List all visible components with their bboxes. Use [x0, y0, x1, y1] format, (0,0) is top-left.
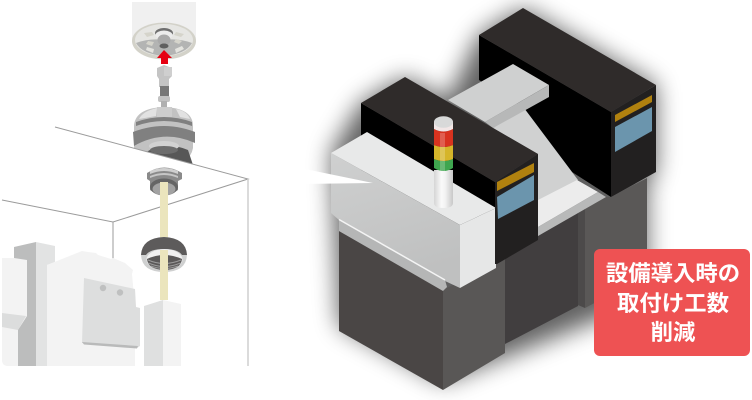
front unit end face [495, 154, 538, 264]
mounting flange disc [132, 22, 196, 60]
callout: reduced installation man-hours [594, 249, 750, 356]
callout: reduced installation man-hours: 取付け工数 [617, 290, 729, 316]
front amber strip [497, 163, 534, 191]
callout wedge [300, 168, 373, 184]
front black unit top and side [361, 77, 538, 264]
ceiling mount backdrop [132, 2, 196, 42]
cream cable [160, 180, 168, 300]
slab trim strip [339, 220, 447, 291]
signal tower [434, 116, 453, 208]
red arrow [157, 50, 172, 64]
main block [47, 251, 135, 366]
gray plank [448, 64, 549, 128]
base right face [443, 258, 505, 390]
left band [2, 313, 26, 330]
machine drop shadow [331, 8, 656, 382]
base recessed middle [505, 205, 585, 344]
rear amber strip [615, 95, 652, 122]
T column [14, 242, 55, 366]
callout: reduced installation man-hours: 削減 [651, 320, 695, 345]
connector stem [157, 65, 172, 110]
rear base block [578, 178, 647, 308]
white slab [331, 132, 496, 291]
base left face [339, 231, 443, 390]
inclined deck [493, 108, 578, 205]
callout: reduced installation man-hours: 設備導入時の [606, 261, 740, 286]
left block [2, 258, 27, 366]
equipment silhouettes [2, 242, 181, 366]
panel: cutaway installation view [2, 2, 248, 366]
cable column [144, 300, 181, 366]
plate with bolts [82, 278, 140, 348]
floor plate [538, 180, 606, 236]
machine: isometric equipment [300, 8, 656, 390]
large connector body [133, 107, 195, 166]
rear blue screen [615, 107, 652, 152]
lock nut [141, 237, 187, 300]
front blue screen [497, 175, 534, 219]
threaded ring fitting [147, 168, 182, 200]
enclosure top face [2, 127, 248, 240]
rear black unit [479, 8, 656, 197]
enclosure lines [2, 127, 248, 366]
